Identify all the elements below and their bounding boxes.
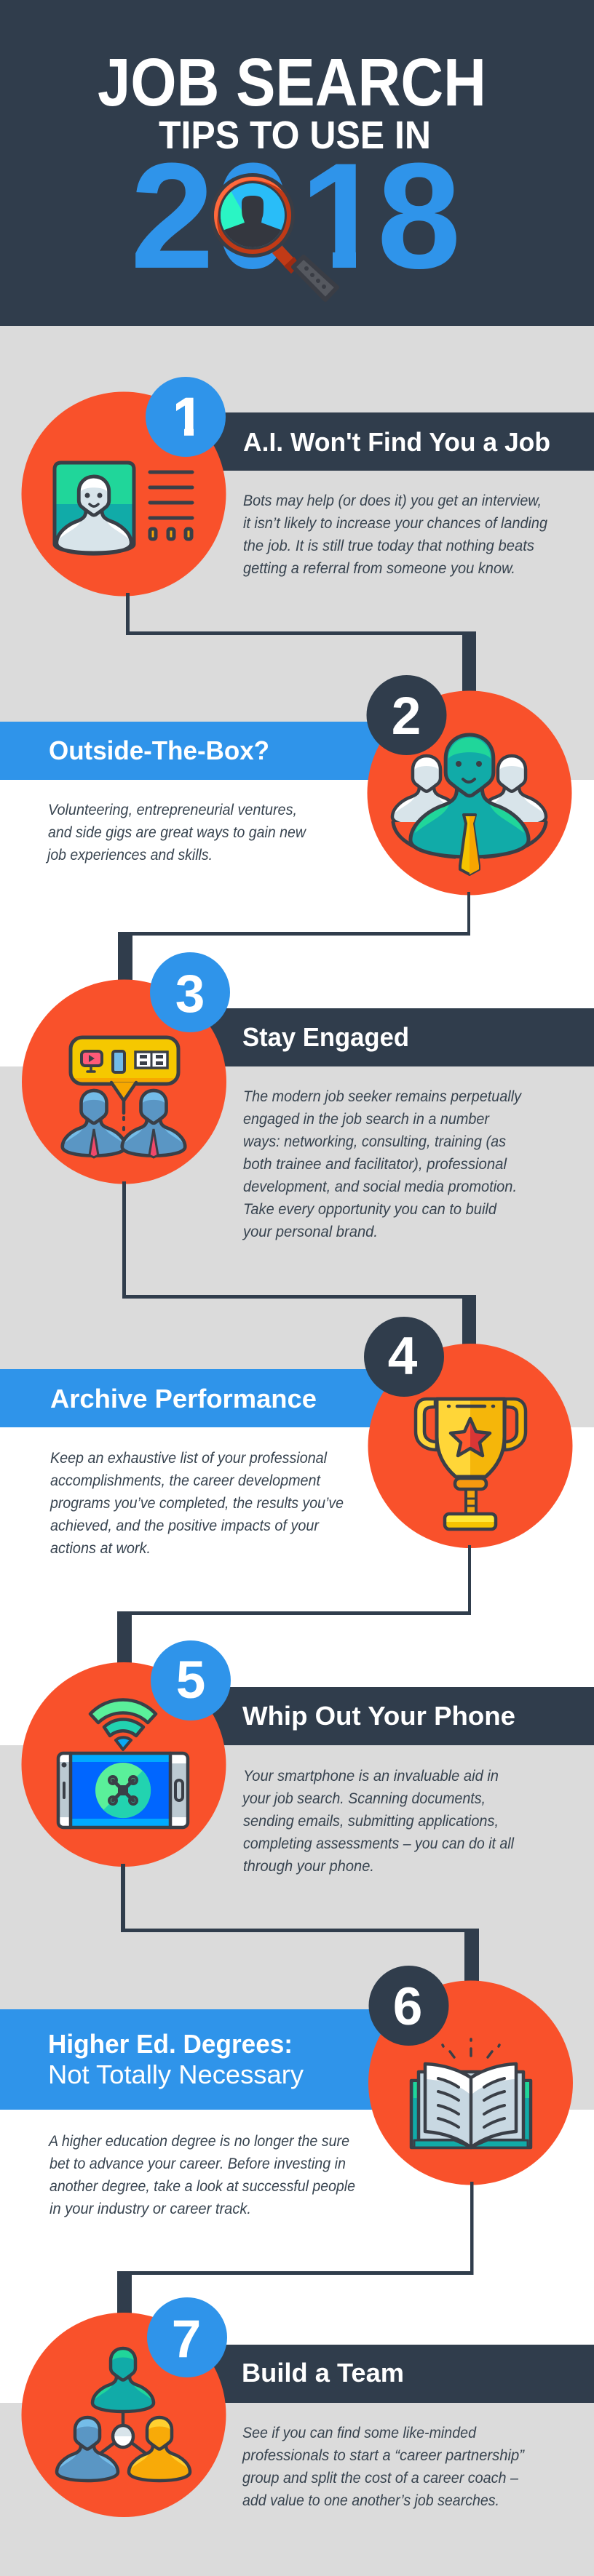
body text 3: Take every opportunity you can to build: [243, 1201, 497, 1218]
body text 3: The modern job seeker remains perpetually: [243, 1088, 522, 1105]
number badge 7: [147, 2297, 227, 2377]
body text 3: development, and social media promotion.: [243, 1179, 517, 1195]
number badge 6: [368, 1966, 448, 2046]
heading band 5: [204, 1687, 594, 1745]
body text 7: professionals to start a “career partnership”: [242, 2447, 525, 2464]
number badge 3: [150, 952, 230, 1032]
body text 2: and side gigs are great ways to gain new: [48, 824, 307, 841]
circle 1: [22, 391, 226, 597]
icon: trophy: [416, 1399, 526, 1529]
body text 7: See if you can find some like-minded: [242, 2425, 477, 2441]
body text 5: your job search. Scanning documents,: [241, 1790, 486, 1807]
section 4: archive performance: [0, 1317, 572, 1557]
body text 6: bet to advance your career. Before investing in: [50, 2156, 346, 2172]
body text 4: achieved, and the positive impacts of your: [50, 1518, 320, 1534]
body text 3: engaged in the job search in a number: [243, 1111, 490, 1128]
circle 3: [22, 979, 226, 1184]
number badge 2: [367, 675, 447, 755]
heading band 7: [204, 2345, 594, 2403]
heading 2: Outside-The-Box?: [49, 735, 269, 765]
icon: wifi and smartphone: [58, 1699, 188, 1827]
subtitle: tips to use in: TIPS TO USE IN: [159, 113, 431, 157]
connector 6 to 7: [117, 2182, 473, 2321]
body text 1: getting a referral from someone you know.: [243, 560, 515, 577]
body text 4: programs you’ve completed, the results you’ve: [50, 1495, 344, 1512]
body text 5: completing assessments – you can do it all: [243, 1835, 515, 1852]
body text 5: [241, 1768, 515, 1875]
body text 5: sending emails, submitting applications,: [243, 1813, 499, 1830]
body text 5: Your smartphone is an invaluable aid in: [243, 1768, 499, 1785]
section 5: whip out your phone: [22, 1640, 594, 1875]
circle 5: [22, 1662, 226, 1867]
circle 6: [368, 1980, 573, 2185]
heading 3: Stay Engaged: [242, 1022, 409, 1052]
icon: two people networking: [63, 1037, 185, 1157]
body text 2: [45, 802, 307, 864]
section 2: outside-the-box: [0, 675, 572, 895]
icon: id profile card: [55, 463, 192, 554]
number badge 7: 7: [172, 2310, 201, 2369]
title: job search: JOB SEARCH: [98, 44, 486, 120]
year 2018: [135, 163, 456, 269]
connector 3 to 4: [122, 1181, 476, 1353]
circle 7: [22, 2313, 226, 2517]
number badge 4: 4: [388, 1327, 418, 1386]
body text 7: [242, 2425, 525, 2509]
heading band 4: [0, 1369, 386, 1427]
connector 5 to 6: [121, 1864, 479, 1986]
body text 4: Keep an exhaustive list of your professional: [50, 1450, 328, 1467]
body text 5: through your phone.: [243, 1858, 374, 1875]
heading 7: Build a Team: [242, 2358, 404, 2388]
body text 1: [243, 493, 547, 577]
header panel: [0, 0, 594, 326]
section 1: a.i. won't find you a job: [22, 377, 594, 597]
year 2018: 2: [130, 132, 214, 300]
body text 1: Bots may help (or does it) you get an interview,: [243, 493, 542, 509]
body text 4: [50, 1450, 344, 1557]
year 2018: 0: [214, 132, 292, 300]
section 6: higher ed. degrees: [0, 1966, 573, 2217]
number badge 1: 1: [173, 388, 202, 447]
circle 2: [367, 691, 572, 895]
heading 4: Archive Performance: [50, 1384, 317, 1413]
body text 2: Volunteering, entrepreneurial ventures,: [48, 802, 297, 818]
body text 7: add value to one another’s job searches.: [242, 2492, 499, 2509]
body text 2: job experiences and skills.: [45, 847, 213, 864]
body text 4: actions at work.: [50, 1540, 151, 1557]
icon: team network: [57, 2348, 190, 2481]
section 7: build a team: [22, 2297, 594, 2517]
connector 4 to 5: [117, 1545, 471, 1673]
body text 3: [242, 1088, 522, 1240]
year 2018: 1: [300, 132, 384, 300]
icon: open book: [411, 2039, 531, 2148]
body text 3: both trainee and facilitator), professional: [243, 1156, 507, 1173]
number badge 2: 2: [392, 687, 421, 746]
heading 1: A.I. Won't Find You a Job: [243, 427, 550, 457]
number badge 5: [151, 1640, 231, 1720]
body text 6: in your industry or career track.: [50, 2201, 251, 2217]
year 2018: 8: [377, 132, 461, 300]
heading band 1: [204, 412, 594, 471]
number badge 4: [364, 1317, 444, 1397]
icon: magnifying glass: [210, 173, 337, 300]
heading band 6: [0, 2009, 386, 2110]
number badge 5: 5: [176, 1651, 205, 1710]
body text 6: [47, 2133, 355, 2217]
icon: team with tie: [390, 735, 552, 874]
number badge 6: 6: [393, 1977, 422, 2036]
body text 7: group and split the cost of a career coach –: [242, 2470, 518, 2487]
body text 4: accomplishments, the career development: [50, 1472, 321, 1489]
body text 1: the job. It is still true today that nothing beats: [243, 538, 534, 554]
connector 2 to 3: [118, 892, 470, 989]
heading 6: Higher Ed. Degrees:: [48, 2029, 293, 2059]
heading 6: [48, 2029, 304, 2089]
circle 4: [368, 1344, 572, 1548]
body text 3: ways: networking, consulting, training (as: [243, 1133, 506, 1150]
heading 5: Whip Out Your Phone: [242, 1701, 515, 1731]
heading band 2: [0, 722, 386, 780]
number badge 1: [146, 377, 226, 457]
body text 3: your personal brand.: [242, 1224, 378, 1240]
heading band 3: [204, 1008, 594, 1066]
number badge 3: 3: [175, 965, 205, 1024]
section 3: stay engaged: [22, 952, 594, 1240]
body text 6: another degree, take a look at successful people: [50, 2178, 355, 2195]
connector 1 to 2: [126, 593, 476, 698]
body text 6: A higher education degree is no longer the sure: [47, 2133, 349, 2150]
body text 1: it isn’t likely to increase your chances of landing: [243, 515, 547, 532]
heading 6: Not Totally Necessary: [48, 2059, 304, 2089]
